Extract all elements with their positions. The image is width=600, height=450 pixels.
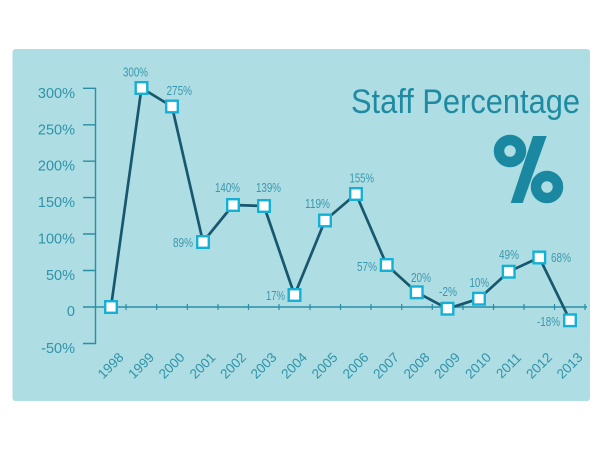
y axis labels: 150% xyxy=(38,195,75,211)
x axis year labels: 1999 xyxy=(125,350,157,382)
y axis labels xyxy=(38,86,75,357)
line series xyxy=(111,88,570,320)
y axis labels: 200% xyxy=(38,158,75,174)
x axis year labels: 2012 xyxy=(523,350,555,382)
y axis labels: -50% xyxy=(41,341,75,357)
x axis year labels: 2006 xyxy=(340,350,372,382)
x axis year labels: 2003 xyxy=(248,350,280,382)
data labels: 300% xyxy=(123,64,148,80)
data labels: 119% xyxy=(305,196,330,211)
data labels: 57% xyxy=(357,259,377,274)
data labels: -2% xyxy=(439,284,457,299)
x axis year labels: 2000 xyxy=(156,350,188,382)
y axis labels: 100% xyxy=(38,232,75,248)
data labels: 49% xyxy=(499,247,519,262)
panel: chart background xyxy=(12,49,590,401)
x axis year labels: 2009 xyxy=(431,350,463,382)
y axis labels: 250% xyxy=(38,122,75,138)
x axis year labels xyxy=(95,349,586,382)
data labels: 10% xyxy=(470,275,489,290)
x axis year labels: 2008 xyxy=(401,350,433,382)
y axis labels: 50% xyxy=(46,268,75,284)
data labels: 139% xyxy=(256,180,281,195)
x axis year labels: 2005 xyxy=(309,350,341,382)
icon: percent sign xyxy=(499,136,558,203)
x axis year labels: 2007 xyxy=(370,350,402,382)
data labels: 17% xyxy=(266,288,285,303)
data point markers xyxy=(105,82,576,326)
x axis year labels: 2010 xyxy=(462,350,494,382)
data labels: 155% xyxy=(350,170,374,186)
data labels: -18% xyxy=(537,314,560,329)
x axis year labels: 1998 xyxy=(95,350,127,382)
data labels: 89% xyxy=(173,235,193,250)
x axis year labels: 2001 xyxy=(187,350,219,382)
x axis year labels: 2013 xyxy=(554,350,586,382)
y axis labels: 0 xyxy=(67,304,75,320)
data labels: 275% xyxy=(166,83,192,98)
data labels xyxy=(123,64,571,329)
x axis year labels: 2004 xyxy=(278,349,310,382)
data labels: 140% xyxy=(215,180,240,195)
x axis xyxy=(83,304,587,382)
y axis xyxy=(38,86,96,357)
x axis year labels: 2011 xyxy=(493,350,524,381)
y axis labels: 300% xyxy=(38,86,75,102)
title: Staff Percentage xyxy=(351,83,580,121)
data labels: 20% xyxy=(411,270,431,285)
x axis year labels: 2002 xyxy=(217,350,249,382)
data labels: 68% xyxy=(551,250,571,265)
